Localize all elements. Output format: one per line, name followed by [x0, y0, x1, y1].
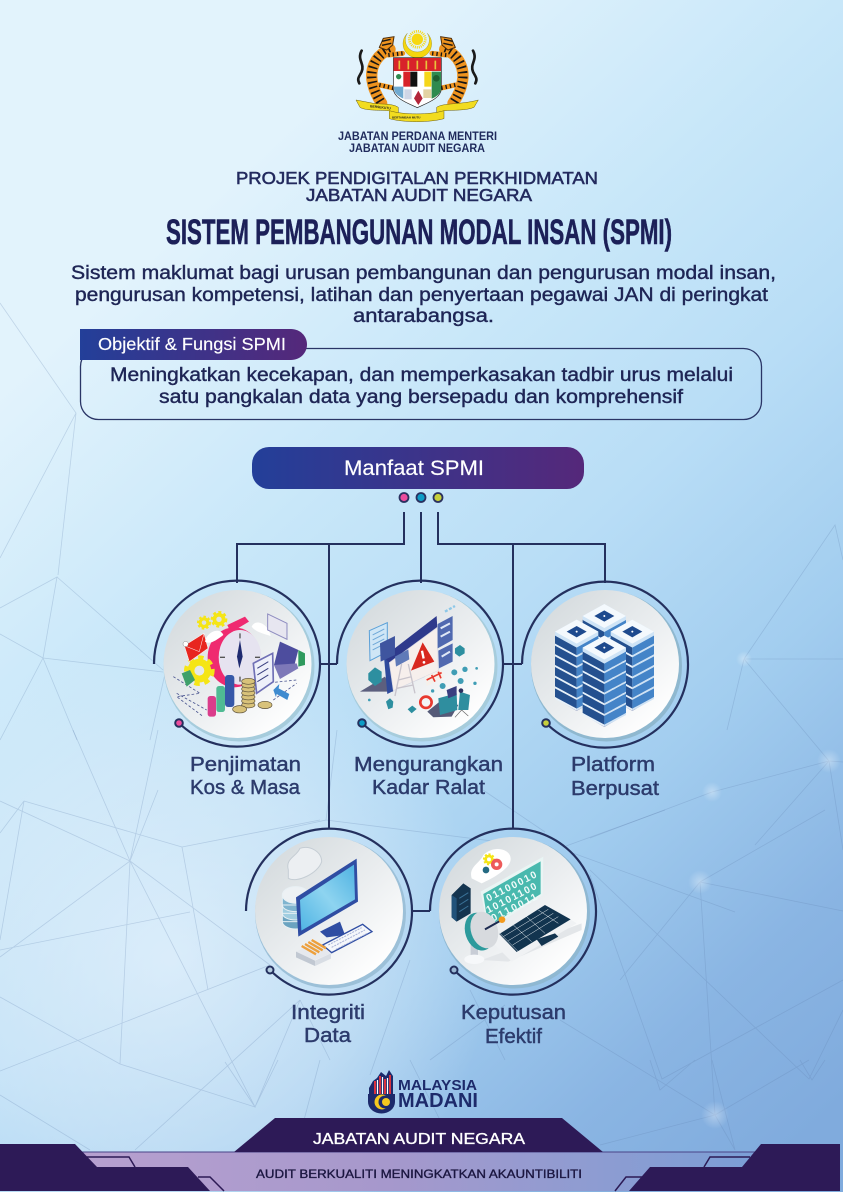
objektif tab: Objektif & Fungsi SPMI	[98, 334, 286, 354]
label: integriti data	[291, 1001, 365, 1047]
connector lines	[237, 512, 605, 911]
description paragraph: antarabangsa.	[353, 306, 494, 327]
icon: server racks	[555, 604, 654, 727]
project heading: JABATAN AUDIT NEGARA	[306, 185, 532, 205]
objektif text	[110, 365, 733, 408]
icon: data analysis terminal and satellite dish: 10101100	[485, 881, 539, 916]
background network pattern	[0, 303, 843, 1150]
crest caption: JABATAN PERDANA MENTERI	[338, 131, 497, 143]
footer centre tab: JABATAN AUDIT NEGARA	[313, 1131, 526, 1148]
panel: objektif dan fungsi	[80, 329, 762, 420]
footer left block	[0, 1144, 210, 1191]
icon: data analysis terminal and satellite dish: 01100010	[485, 869, 539, 904]
footer band	[0, 1118, 840, 1191]
crest: Jata Negara	[356, 31, 478, 122]
label: keputusan efektif: Efektif	[485, 1025, 542, 1048]
objektif text: satu pangkalan data yang bersepadu dan komprehensif	[159, 387, 684, 408]
crest caption	[338, 131, 497, 155]
project heading	[236, 168, 598, 205]
panel: keputusan efektif	[430, 829, 596, 995]
motto ribbon	[356, 100, 478, 122]
label: penjimatan kos dan masa	[190, 753, 301, 799]
panel: platform berpusat	[522, 582, 688, 748]
manfaat heading pill	[252, 447, 584, 489]
footer outline accents	[86, 1157, 750, 1191]
icon: stopwatch and charts	[173, 612, 305, 717]
icon: data analysis terminal and satellite dish: 0110011	[490, 892, 540, 924]
motto ribbon: BERTAMBAH MUTU	[392, 116, 420, 120]
logo: Malaysia Madani: MADANI	[398, 1090, 478, 1112]
connector dots	[400, 493, 442, 502]
right tiger	[432, 37, 476, 103]
panel: penjimatan kos dan masa	[154, 581, 320, 747]
manfaat heading pill: Manfaat SPMI	[344, 457, 484, 480]
label: platform berpusat: Berpusat	[571, 777, 659, 800]
motto ribbon: BERSEKUTU	[370, 104, 391, 111]
label: mengurangkan kadar ralat: Kadar Ralat	[372, 776, 485, 799]
label: keputusan efektif	[461, 1001, 566, 1048]
label: platform berpusat	[571, 753, 659, 800]
label: keputusan efektif: Keputusan	[461, 1001, 566, 1024]
description paragraph: Sistem maklumat bagi urusan pembangunan dan pengurusan modal insan,	[71, 263, 776, 284]
background glow points	[688, 651, 841, 1129]
footer slogan: AUDIT BERKUALITI MENINGKATKAN AKAUNTIBILITI	[256, 1167, 582, 1181]
shield	[393, 58, 441, 108]
project heading: PROJEK PENDIGITALAN PERKHIDMATAN	[236, 168, 598, 188]
panel: mengurangkan kadar ralat	[337, 581, 503, 747]
description paragraph: pengurusan kompetensi, latihan dan penyertaan pegawai JAN di peringkat	[75, 285, 769, 306]
label: penjimatan kos dan masa: Kos & Masa	[190, 776, 301, 799]
crest caption: JABATAN AUDIT NEGARA	[349, 143, 485, 155]
icon: system error warning window	[360, 606, 478, 717]
objektif tab	[80, 329, 307, 360]
description paragraph	[71, 263, 776, 327]
label: penjimatan kos dan masa: Penjimatan	[190, 753, 301, 776]
crescent and star	[403, 31, 432, 58]
label: mengurangkan kadar ralat	[354, 753, 503, 799]
left tiger	[358, 37, 403, 103]
icon: hand with stripes	[368, 1070, 395, 1114]
logo: Malaysia Madani	[368, 1070, 478, 1114]
label: integriti data: Integriti	[291, 1001, 365, 1024]
label: platform berpusat: Platform	[571, 753, 655, 776]
objektif text: Meningkatkan kecekapan, dan memperkasakan tadbir urus melalui	[110, 365, 733, 386]
logo: Malaysia Madani: MALAYSIA	[398, 1077, 477, 1094]
label: integriti data: Data	[304, 1024, 352, 1047]
label: mengurangkan kadar ralat: Mengurangkan	[354, 753, 503, 776]
panel: integriti data	[246, 829, 412, 995]
footer centre tab	[234, 1118, 603, 1152]
icon: data analysis terminal and satellite dish	[452, 849, 582, 964]
footer right block	[629, 1144, 840, 1191]
icon: computer and database	[282, 847, 372, 966]
